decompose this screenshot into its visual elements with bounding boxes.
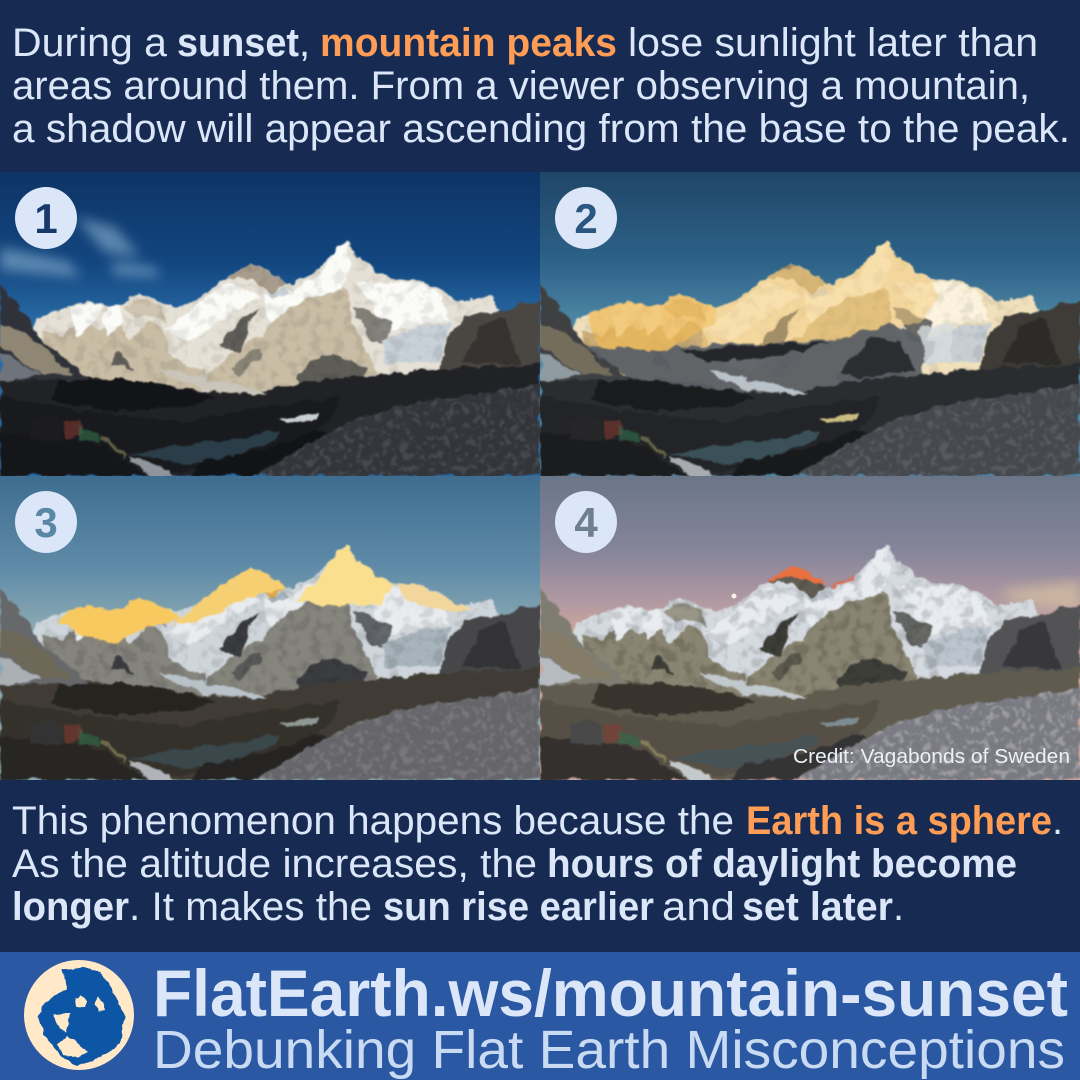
number badge 2 (555, 187, 617, 249)
number badge 1 (15, 187, 77, 249)
intro text: lose sunlight later than (628, 21, 1038, 65)
number badge 3: 3 (34, 499, 58, 546)
photo credit: Credit: Vagabonds of Sweden (793, 746, 1070, 768)
explanation text: sun rise earlier (383, 885, 654, 929)
explanation text: Earth is a sphere (746, 799, 1052, 843)
explanation text: . (893, 885, 904, 929)
explanation text: hours of daylight become (547, 842, 1017, 886)
number badge 3 (15, 491, 77, 553)
icon: globe logo (24, 960, 134, 1070)
explanation text: . (1052, 799, 1063, 843)
intro text: areas around them. From a viewer observing a mountain, (12, 64, 1030, 108)
photo panel 4 (540, 476, 1080, 780)
intro text: a shadow will appear ascending from the base to the peak. (12, 107, 1070, 151)
intro text: mountain peaks (320, 21, 617, 65)
number badge 1: 1 (34, 195, 58, 242)
number badge 2: 2 (574, 195, 598, 242)
explanation text: As the altitude increases, the (12, 842, 537, 886)
number badge 4 (555, 491, 617, 553)
intro text: , (299, 21, 310, 65)
explanation text: This phenomenon happens because the (12, 799, 734, 843)
footer band (0, 952, 1080, 1080)
photo panel 1 (0, 172, 540, 476)
explanation text: longer (12, 885, 129, 929)
site url: FlatEarth.ws/mountain-sunset (153, 956, 1068, 1030)
intro text (12, 21, 1070, 151)
photo panel 2 (540, 172, 1080, 476)
intro text: sunset (177, 21, 299, 65)
moon (732, 594, 736, 598)
number badge 4: 4 (574, 499, 598, 546)
explanation text (12, 799, 1063, 929)
tagline: Debunking Flat Earth Misconceptions (153, 1020, 1065, 1080)
intro text: During a (12, 21, 168, 65)
photo panel 3 (0, 476, 540, 780)
explanation text: . It makes the (129, 885, 372, 929)
explanation text: and (662, 885, 735, 929)
explanation text: set later (742, 885, 893, 929)
